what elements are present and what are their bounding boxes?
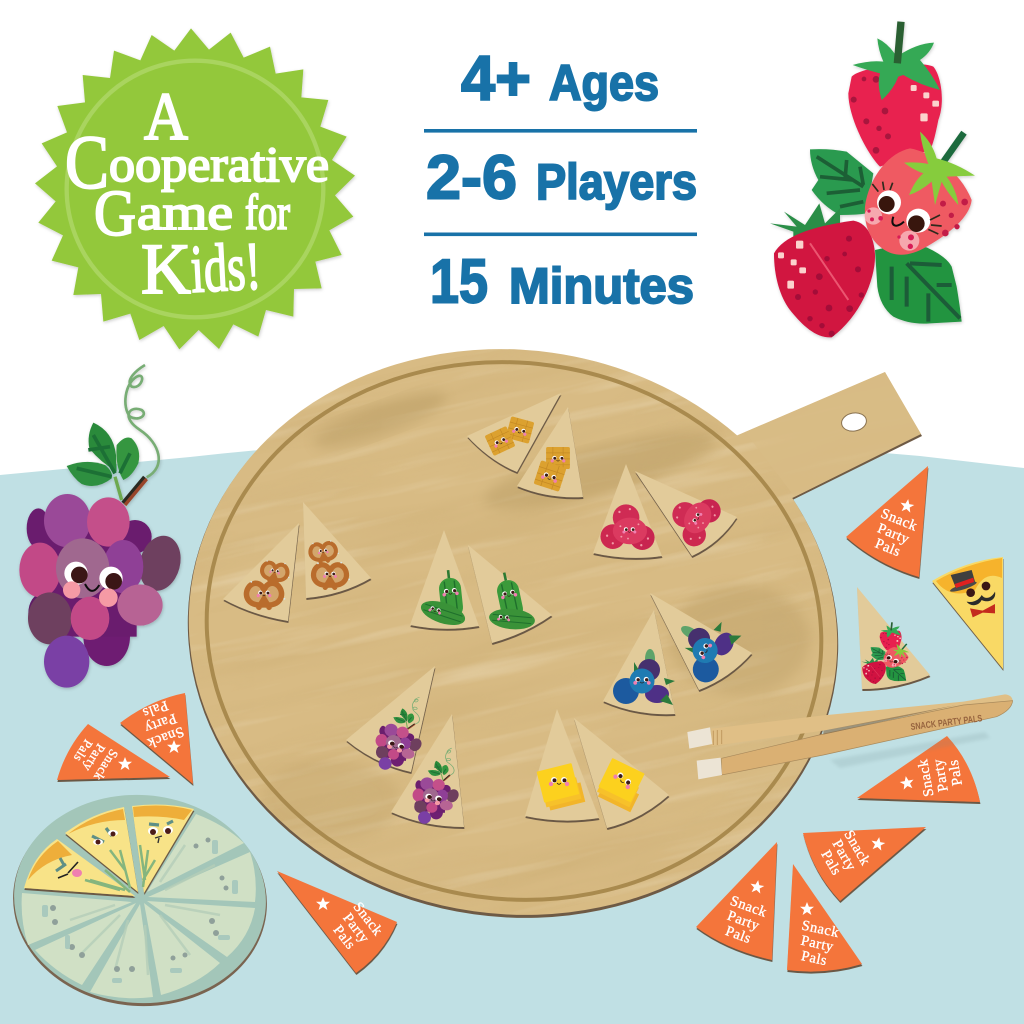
pizza tile: top hat: [932, 557, 1003, 669]
pickle tiles: [410, 530, 552, 643]
tile: lower left: Party: [725, 908, 762, 934]
pretzel tiles: [223, 502, 371, 621]
tile: right middle: Party: [930, 757, 952, 793]
badge text: ids!: [189, 227, 263, 307]
ages stat: Ages: [549, 55, 659, 111]
cracker tiles: [467, 393, 583, 497]
icon: strawberries: [770, 22, 975, 337]
grape berries: [19, 494, 187, 688]
grape face: [63, 562, 123, 607]
tile: left lower: Snack: [91, 747, 122, 784]
vine: [125, 365, 159, 477]
tile: left upper: [120, 693, 193, 784]
badge: a cooperative game for kids: [35, 28, 355, 349]
tile: top right: [846, 466, 928, 577]
bottom strawberry: [770, 203, 840, 243]
players stat: 2-6: [426, 144, 517, 212]
wedge topping marks: [70, 845, 220, 975]
tile: bottom centre left: [277, 871, 397, 973]
strawberry tile: [857, 587, 930, 689]
tong label: SNACK PARTY PALS: [910, 713, 983, 733]
grape leaves: [67, 462, 112, 486]
tile: lower middle: Pals: [800, 948, 829, 969]
handle hole: [840, 411, 868, 433]
tile: bottom centre left: Snack: [350, 899, 386, 939]
minutes stat: [430, 248, 694, 316]
badge text: ame: [137, 184, 233, 240]
tile: left upper: Pals: [140, 697, 170, 721]
badge text: for: [245, 184, 290, 240]
top hat: [949, 570, 995, 617]
strawberry face: [865, 182, 942, 251]
cheese tiles: [525, 709, 669, 828]
tile: top right: Snack: [878, 506, 920, 535]
ages stat: [461, 44, 659, 114]
table background: [0, 438, 1024, 1024]
blueberry tiles: [603, 593, 752, 714]
wheel: pizza scoring tracker: [6, 786, 274, 1015]
tile: lower left: Pals: [723, 923, 753, 947]
tile: bottom centre left: Pals: [330, 922, 358, 953]
board surface: [188, 349, 921, 915]
badge text: [65, 78, 329, 309]
tile: right middle: Pals: [946, 758, 966, 787]
salami tiles: [593, 464, 737, 558]
badge text: G: [94, 177, 136, 250]
tile: lower middle: [787, 864, 862, 972]
grape tiles: [346, 666, 464, 827]
players stat: Players: [536, 154, 697, 210]
board edge: [151, 308, 922, 960]
ages stat: 4+: [461, 44, 531, 114]
badge text: ooperative: [109, 136, 329, 192]
tongs: [687, 694, 1013, 779]
tile: left upper: Snack: [145, 723, 186, 751]
empty wedges: [22, 814, 256, 998]
wheel base: [6, 787, 274, 1015]
juice groove ring: [172, 323, 856, 939]
tile: left lower: Pals: [71, 737, 96, 765]
tile: lower right top: Party: [829, 837, 859, 874]
pizza crusts: [28, 806, 192, 880]
stem: [123, 477, 145, 503]
tile: left lower: Party: [80, 741, 109, 774]
badge starburst: [35, 28, 355, 349]
tong tips: [687, 727, 712, 749]
tile: top right: Party: [875, 520, 912, 548]
minutes stat: 15: [430, 248, 488, 316]
players stat: [426, 144, 697, 212]
badge text: C: [65, 121, 109, 205]
lower leaf: [875, 246, 962, 324]
tile: bottom centre left: Party: [339, 910, 372, 947]
tile: lower right top: Snack: [840, 828, 873, 869]
tile: top right: Pals: [873, 536, 903, 560]
tile: lower right top: [803, 827, 926, 901]
stats: ages, players, minutes: [424, 44, 697, 316]
tongs shadow: [830, 732, 990, 768]
icon: grapes: [19, 365, 187, 688]
badge text: A: [144, 78, 188, 154]
pizza toppings: [85, 845, 155, 892]
top strawberry: [848, 64, 942, 167]
smiling strawberry: [865, 148, 972, 255]
tile: lower left: Snack: [728, 893, 769, 921]
cutting board: [188, 349, 922, 918]
badge text: K: [141, 229, 191, 309]
grumpy pizza faces: [56, 821, 173, 878]
minutes stat: Minutes: [509, 258, 694, 314]
tile: lower middle: Snack: [800, 918, 841, 941]
tile: right middle: Snack: [915, 757, 937, 798]
tile: lower middle: Party: [799, 933, 835, 955]
faint faces: [50, 838, 228, 972]
tongs arms: [687, 694, 1013, 779]
tile: lower left: [696, 842, 777, 960]
orange tile backs: [57, 466, 980, 973]
upper leaf: [810, 149, 873, 215]
tile: lower right top: Pals: [817, 848, 844, 878]
filled pizza wedges: [24, 805, 194, 896]
tile: right middle: [857, 736, 980, 802]
tile: left upper: Party: [142, 710, 179, 736]
tile: left lower: [57, 724, 170, 784]
